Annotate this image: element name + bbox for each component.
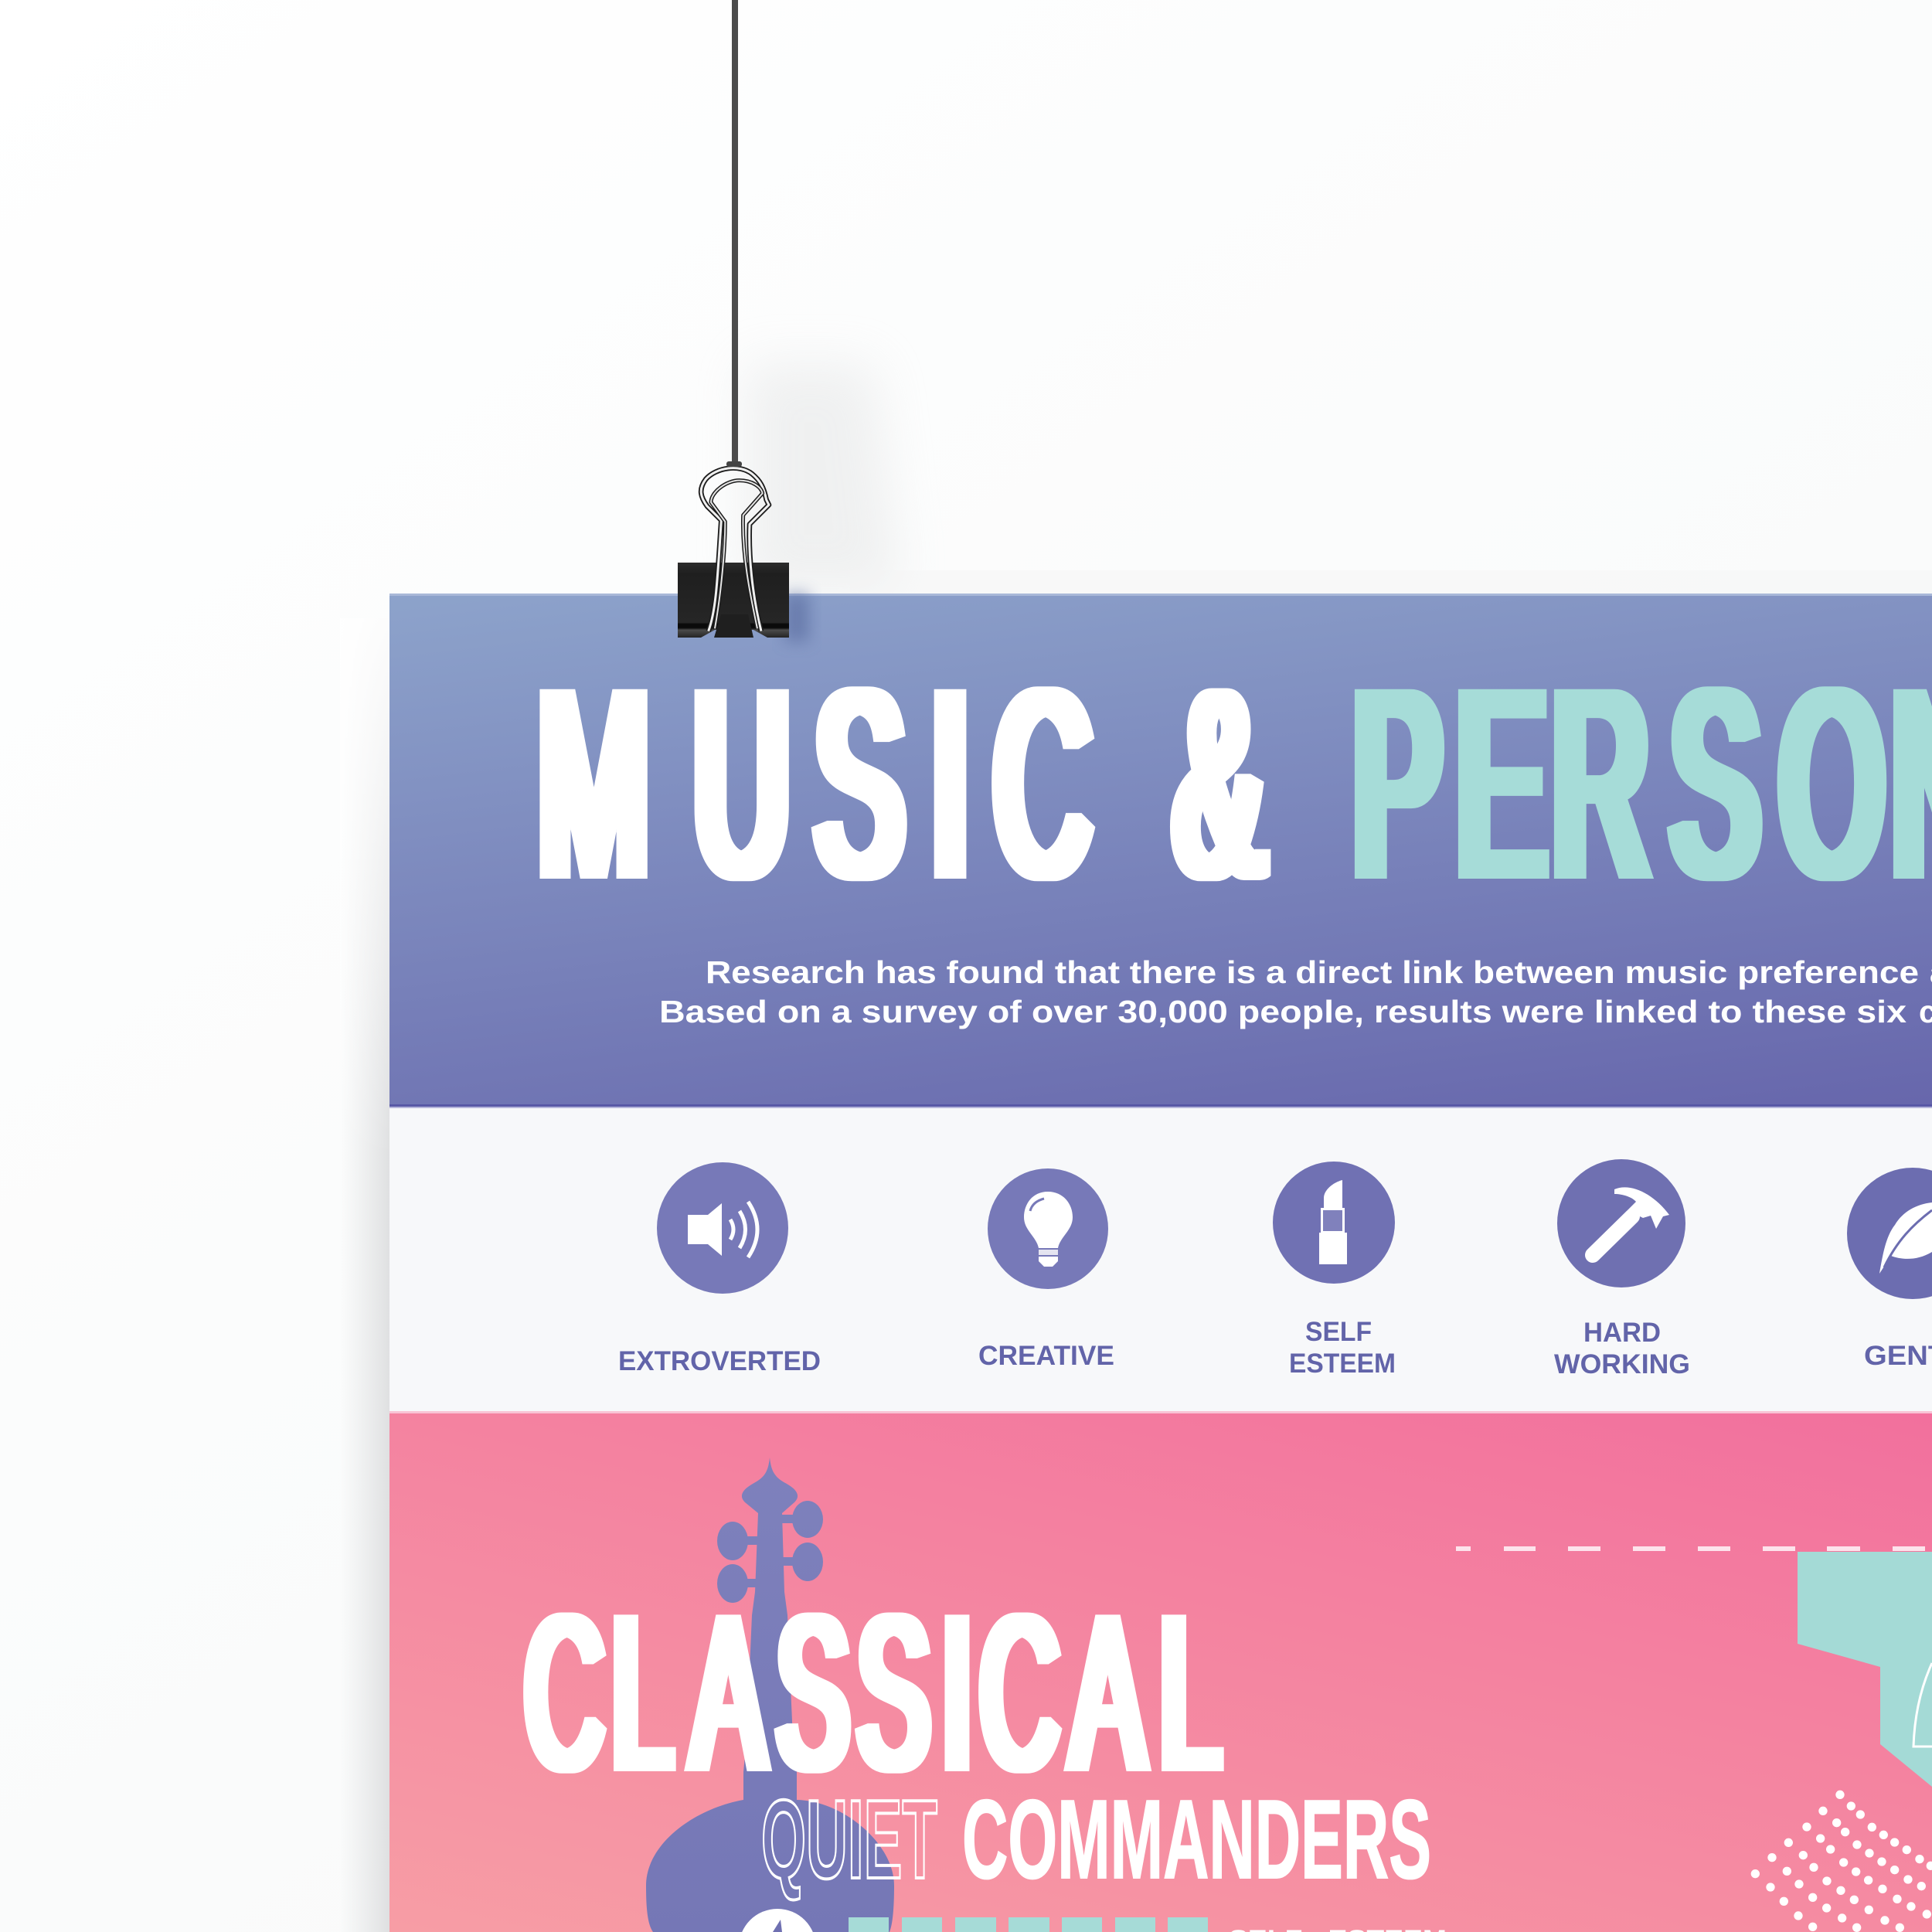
violin silhouette [646, 1458, 894, 1932]
title: & [1175, 637, 1263, 930]
subheading: quiet commanders: QUIET [761, 1777, 937, 1902]
intro paragraph [659, 954, 1932, 1029]
icon: feather (gentle) [1847, 1168, 1932, 1299]
panel: title header band [389, 594, 1932, 1108]
intro paragraph: Based on a survey of over 30,000 people, results were linked to these six [659, 994, 1906, 1029]
label: hard working: WORKING [1554, 1349, 1690, 1379]
title [539, 637, 1932, 930]
icon: trait badge [739, 1909, 816, 1932]
dashed line [1456, 1546, 1925, 1551]
title: MUSIC [539, 637, 1090, 930]
icon: hammer (hard working) [1557, 1159, 1685, 1287]
subheading: quiet commanders: COMMANDERS [962, 1777, 1431, 1902]
label: self esteem [1289, 1317, 1396, 1379]
label: self esteem: ESTEEM [1289, 1349, 1396, 1379]
icon: light bulb (creative) [988, 1168, 1108, 1289]
label: hard working [1554, 1318, 1690, 1379]
teal shape with outline [1798, 1552, 1932, 1787]
dot pattern [1755, 1794, 1930, 1927]
label: hard working: HARD [1583, 1318, 1661, 1348]
label: creative: CREATIVE [978, 1341, 1114, 1371]
clip shadow on header [784, 594, 809, 641]
icon: speaker (extroverted) [657, 1162, 788, 1294]
poster [389, 594, 1932, 1932]
hanging cord [732, 0, 738, 465]
heading: classical: CLASSICAL [525, 1572, 1220, 1813]
label: extroverted: EXTROVERTED [618, 1346, 821, 1376]
rating bars [849, 1917, 1208, 1932]
clip shadow on wall [746, 363, 900, 594]
poster edge shadow [340, 570, 1932, 1932]
subheading: quiet commanders [761, 1777, 1431, 1902]
panel: personality traits band [389, 1108, 1932, 1413]
panel: classical section [389, 1413, 1932, 1932]
intro paragraph: Research has found that there is a direct link between music preference [706, 954, 1919, 990]
label: self esteem: SELF [1305, 1317, 1372, 1347]
icon: lipstick (self esteem) [1273, 1162, 1395, 1284]
binder clip [678, 461, 789, 638]
